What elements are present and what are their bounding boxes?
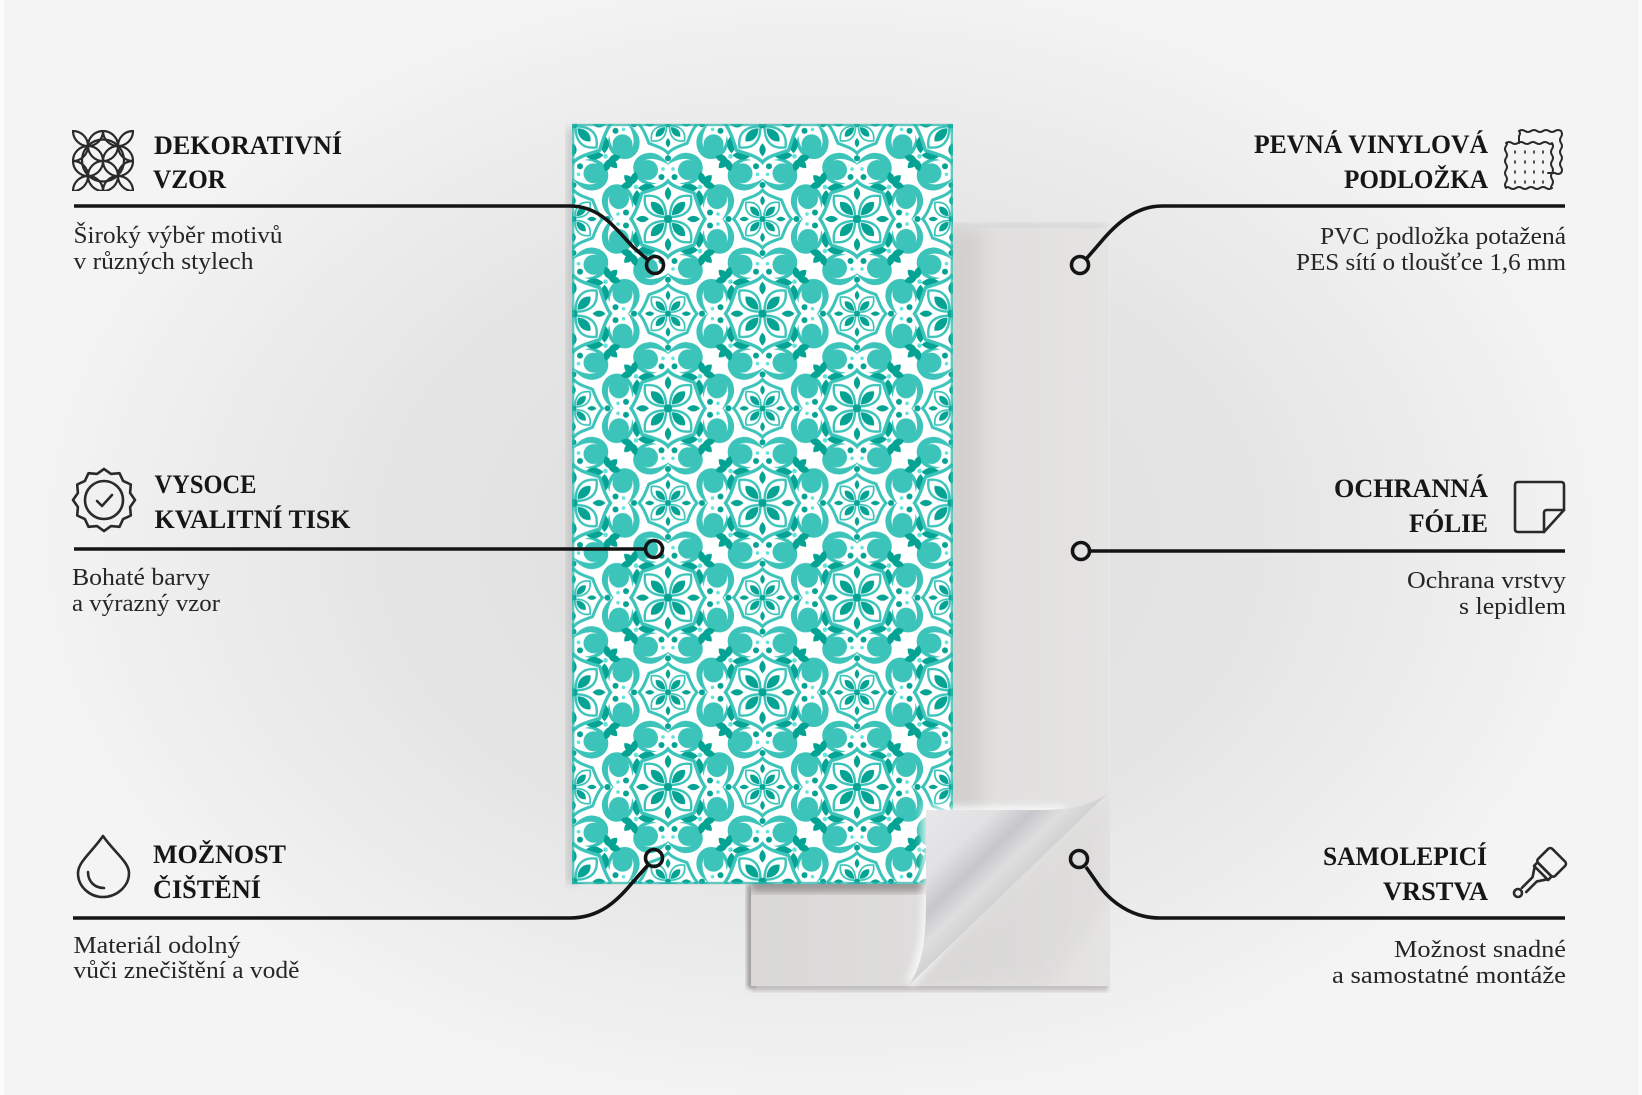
description: s lepidlem	[1459, 594, 1566, 620]
decorative teal tile pattern panel	[572, 124, 953, 884]
description: vůči znečištění a vodě	[74, 958, 300, 984]
icon: interlaced circles	[72, 130, 134, 191]
description: Možnost snadné	[1394, 937, 1566, 963]
description	[1407, 568, 1566, 620]
description: v různých stylech	[74, 249, 254, 275]
description	[72, 565, 220, 617]
icon: glue bottle	[1514, 847, 1567, 898]
peeled corner of protective film	[910, 793, 1110, 986]
icon: quality badge with check	[73, 469, 135, 531]
connector line with marker	[73, 850, 662, 918]
feature: adhesive layer	[1070, 842, 1567, 989]
heading: DEKORATIVNÍ	[154, 131, 342, 160]
heading	[1334, 474, 1488, 538]
heading: VYSOCE	[154, 470, 256, 499]
description: PVC podložka potažená	[1320, 224, 1566, 250]
connector line with marker	[74, 540, 662, 558]
heading: ČIŠTĚNÍ	[153, 875, 261, 904]
heading	[1323, 842, 1488, 906]
product: backing sheet	[747, 224, 1110, 991]
heading: KVALITNÍ TISK	[154, 505, 351, 534]
connector line with marker	[74, 206, 664, 274]
description: a výrazný vzor	[72, 591, 220, 617]
heading	[153, 840, 286, 904]
feature: protective film	[1072, 474, 1566, 620]
description	[74, 222, 282, 275]
description: PES sítí o tloušťce 1,6 mm	[1296, 250, 1566, 276]
feature: cleaning	[73, 836, 662, 984]
description	[74, 933, 300, 984]
heading: PODLOŽKA	[1344, 165, 1488, 194]
description: Široký výběr motivů	[74, 222, 282, 249]
panel shadow on background	[567, 128, 577, 884]
icon: sheet with folded corner	[1515, 482, 1564, 532]
heading	[153, 131, 342, 194]
feature: decorative pattern	[72, 130, 666, 276]
connector line with marker	[1072, 206, 1565, 274]
heading: OCHRANNÁ	[1334, 474, 1488, 503]
description: Bohaté barvy	[72, 565, 210, 591]
description	[1332, 937, 1566, 989]
heading: SAMOLEPICÍ	[1323, 842, 1487, 871]
description: a samostatné montáže	[1332, 963, 1566, 989]
connector line with marker	[1070, 850, 1565, 918]
feature: vinyl backing	[1072, 130, 1566, 276]
feature: high quality print	[72, 469, 662, 617]
heading: MOŽNOST	[153, 840, 286, 869]
heading: FÓLIE	[1409, 509, 1488, 538]
description	[1296, 224, 1566, 276]
connector line with marker	[1072, 542, 1565, 560]
description: Ochrana vrstvy	[1407, 568, 1566, 594]
description: Materiál odolný	[74, 933, 241, 959]
heading	[1254, 130, 1488, 194]
product: shadow of decorative panel	[751, 230, 982, 892]
heading	[154, 470, 351, 534]
heading: VRSTVA	[1383, 877, 1488, 906]
icon: water drop	[78, 836, 129, 897]
icon: textured material	[1505, 130, 1562, 189]
heading: VZOR	[153, 165, 226, 194]
heading: PEVNÁ VINYLOVÁ	[1254, 130, 1488, 159]
